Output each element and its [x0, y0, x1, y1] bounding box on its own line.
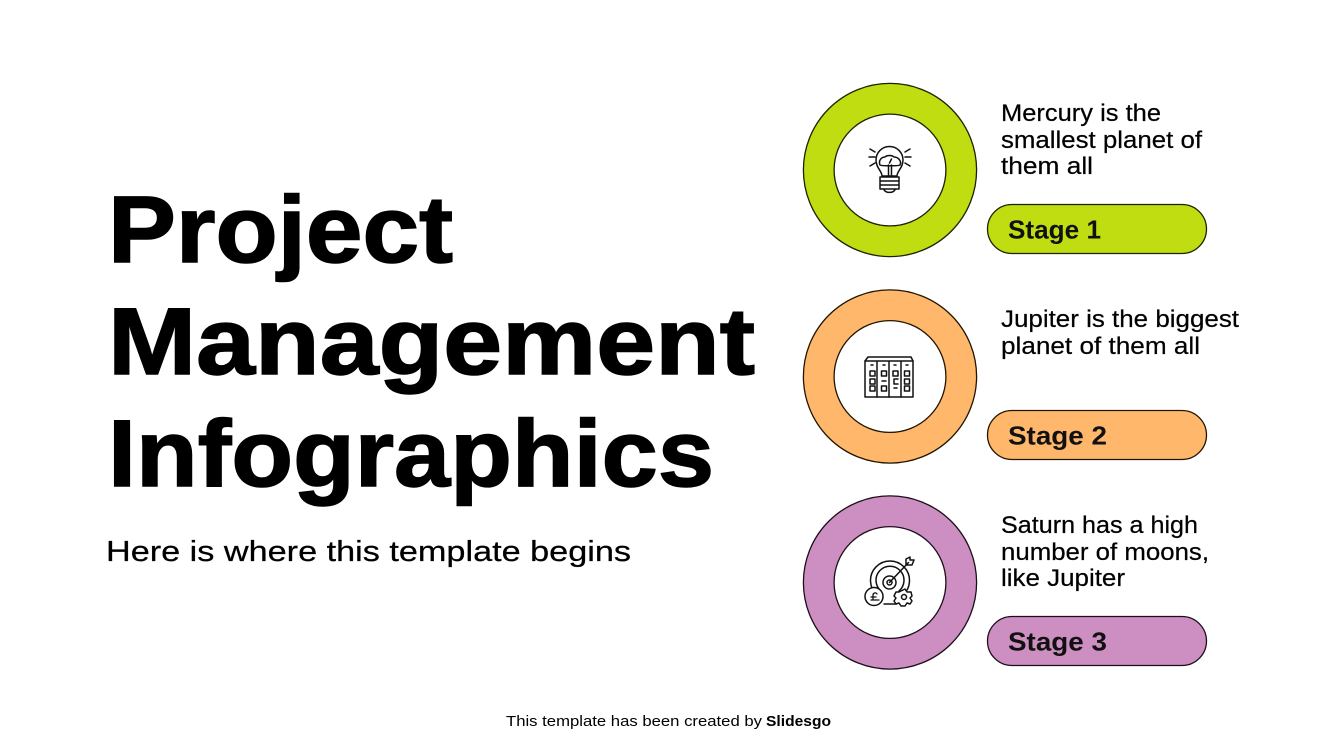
title: Project	[108, 177, 453, 283]
text: stage 3 description: number of moons,	[1001, 539, 1209, 566]
icon: target with dart, coin and gear	[865, 557, 914, 606]
text: stage 3 description: Saturn has a high	[1001, 512, 1198, 539]
footer credit: This template has been created by	[506, 714, 763, 730]
stage 2 group	[819, 305, 1239, 460]
ring: stage 1	[819, 99, 961, 241]
ring fill: stage 3	[819, 511, 961, 654]
footer credit	[506, 714, 831, 730]
footer credit: Slidesgo	[766, 714, 831, 730]
text: stage 3 description	[1001, 512, 1209, 592]
pill: stage 2	[988, 410, 1206, 460]
icon: calendar board	[865, 357, 913, 397]
title: Infographics	[108, 401, 714, 507]
pill: stage 1: Stage 1	[1008, 214, 1101, 244]
pill: stage 3: Stage 3	[1008, 626, 1107, 656]
title	[108, 177, 755, 507]
ring: stage 2	[819, 305, 961, 448]
subtitle: Here is where this template begins	[106, 536, 631, 568]
ring fill: stage 2	[819, 305, 961, 448]
pill: stage 3	[988, 616, 1206, 666]
pill: stage 1	[988, 204, 1206, 254]
stage 3 group	[819, 511, 1209, 666]
text: stage 2 description: planet of them all	[1001, 333, 1200, 360]
icon: light bulb with brain	[869, 146, 911, 192]
text: stage 1 description: them all	[1001, 153, 1093, 180]
ring: stage 3	[819, 511, 961, 654]
text: stage 1 description	[1001, 100, 1202, 180]
text: stage 2 description: Jupiter is the biggest	[1001, 306, 1239, 333]
text: stage 3 description: like Jupiter	[1001, 565, 1125, 592]
ring fill: stage 1	[819, 99, 961, 241]
text: stage 1 description: Mercury is the	[1001, 100, 1161, 127]
text: stage 1 description: smallest planet of	[1001, 127, 1202, 154]
pill: stage 2: Stage 2	[1008, 420, 1107, 450]
text: stage 2 description	[1001, 306, 1239, 360]
title: Management	[108, 289, 755, 395]
stage 1 group	[819, 99, 1206, 254]
